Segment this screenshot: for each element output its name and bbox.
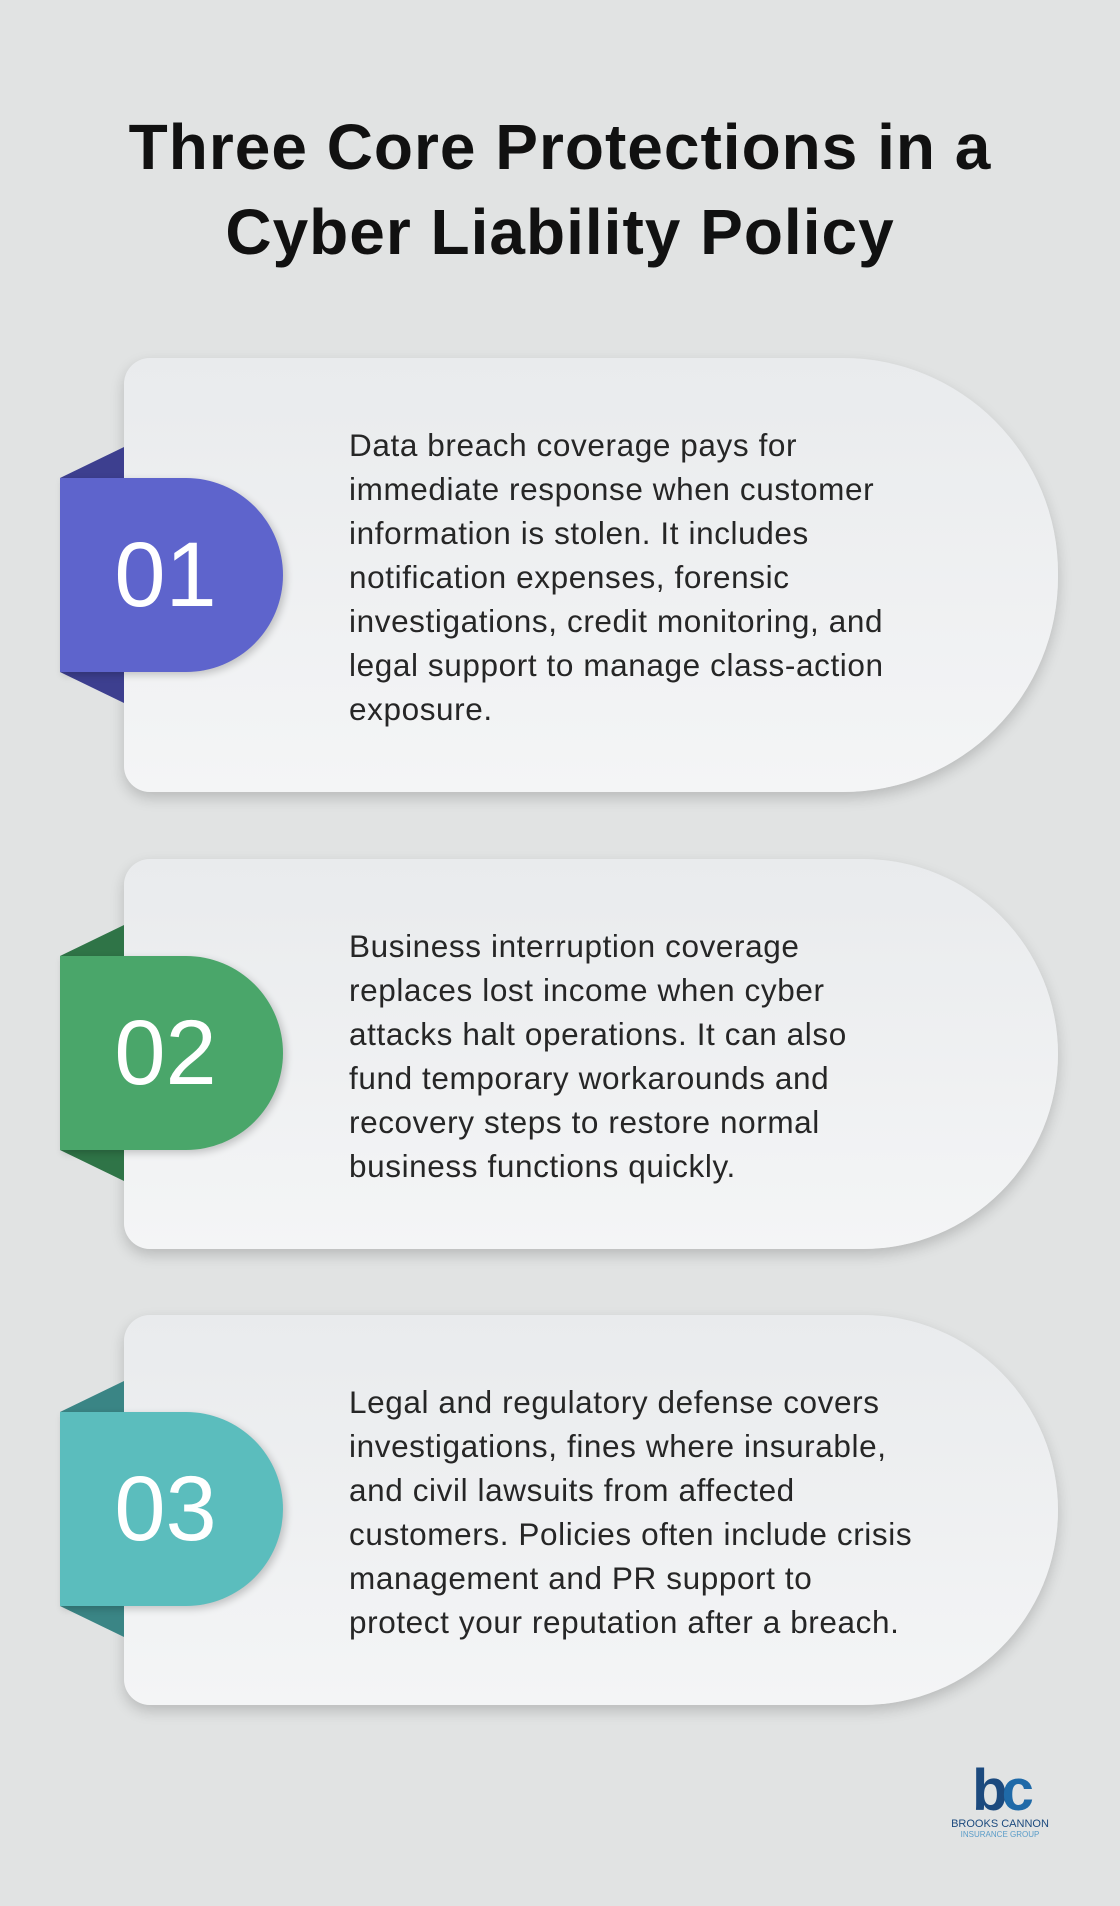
text: data breach: information is stolen. It includes [349, 515, 809, 551]
tab fold 3 [60, 1381, 124, 1637]
logo: INSURANCE GROUP [961, 1830, 1039, 1839]
text: data breach [349, 427, 884, 727]
number tab 01 [60, 478, 283, 672]
logo [951, 1758, 1049, 1839]
number tab 02: 02 [114, 1002, 217, 1104]
text: business interruption [349, 928, 847, 1184]
text: legal defense: customers. Policies often include crisis [349, 1516, 912, 1552]
number tab 01: 01 [114, 524, 217, 626]
tab fold 1 [60, 447, 124, 703]
logo: bc [972, 1758, 1028, 1823]
panel: data breach [124, 358, 1058, 792]
text: legal defense: investigations, fines where insurable, [349, 1428, 887, 1464]
panel: business interruption [124, 859, 1058, 1249]
text: legal defense: protect your reputation after a breach. [349, 1604, 899, 1640]
text: legal defense [349, 1384, 912, 1640]
text: business interruption: recovery steps to restore normal [349, 1104, 820, 1140]
tab fold 2 [60, 925, 124, 1181]
logo: BROOKS CANNON [951, 1818, 1049, 1830]
number tab 02 [60, 956, 283, 1150]
text: data breach: investigations, credit monitoring, and [349, 603, 883, 639]
text: legal defense: and civil lawsuits from affected [349, 1472, 795, 1508]
text: data breach: legal support to manage class-action [349, 647, 884, 683]
text: business interruption: attacks halt operations. It can also [349, 1016, 847, 1052]
text: business interruption: replaces lost income when cyber [349, 972, 825, 1008]
number tab 03: 03 [114, 1458, 217, 1560]
text: business interruption: fund temporary workarounds and [349, 1060, 829, 1096]
text: data breach: notification expenses, forensic [349, 559, 790, 595]
title: Cyber Liability Policy [225, 196, 895, 268]
title: Three Core Protections in a [129, 111, 991, 183]
text: business interruption: Business interruption coverage [349, 928, 800, 964]
text: data breach: Data breach coverage pays for [349, 427, 797, 463]
text: business interruption: business functions quickly. [349, 1148, 736, 1184]
text: data breach: immediate response when customer [349, 471, 874, 507]
panel: legal defense [124, 1315, 1058, 1705]
text: data breach: exposure. [349, 691, 493, 727]
text: legal defense: Legal and regulatory defense covers [349, 1384, 880, 1420]
number tab 03 [60, 1412, 283, 1606]
text: legal defense: management and PR support to [349, 1560, 812, 1596]
title [129, 111, 991, 268]
